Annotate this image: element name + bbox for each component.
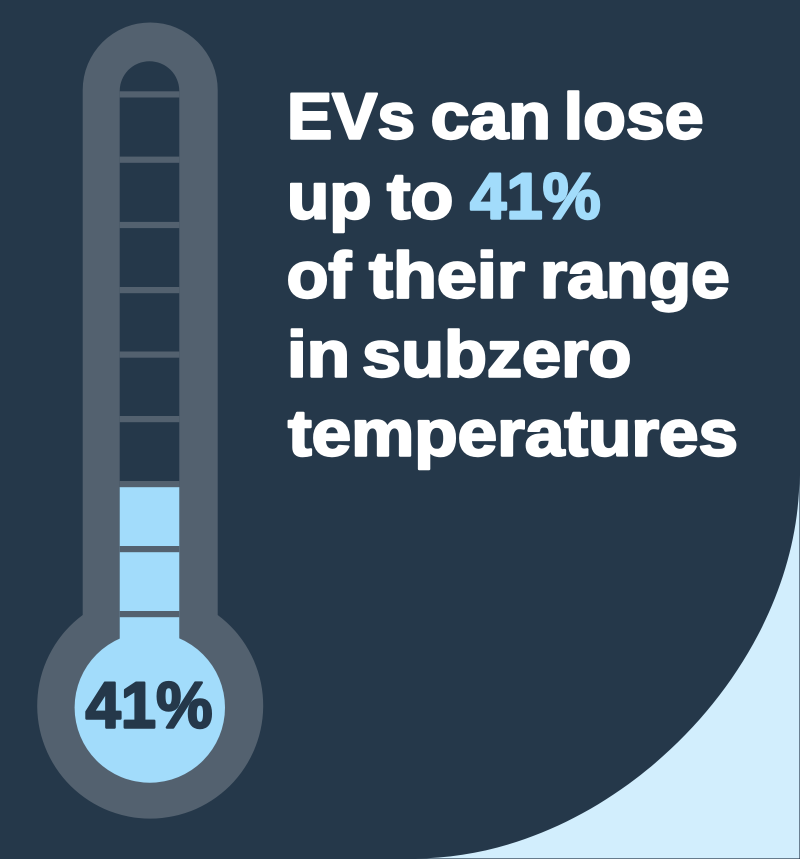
headline line 2: to bbox=[387, 160, 453, 232]
headline highlighted figure: 41% bbox=[470, 160, 601, 232]
headline line 2 bbox=[287, 160, 453, 232]
corner accent: light blue curved shape bbox=[415, 475, 799, 858]
headline line 5: temperatures bbox=[288, 396, 738, 470]
headline line 2: up bbox=[287, 160, 372, 232]
headline line 1 bbox=[287, 80, 704, 152]
headline line 1: lose bbox=[564, 80, 704, 152]
mercury column bbox=[120, 487, 179, 657]
thermometer inner tube bbox=[120, 61, 179, 640]
headline line 3: of bbox=[287, 238, 352, 312]
headline line 3 bbox=[287, 238, 730, 312]
headline line 1: can bbox=[431, 80, 551, 152]
headline bbox=[287, 80, 738, 470]
headline line 3: their bbox=[369, 238, 525, 312]
thermometer bbox=[37, 22, 263, 819]
bulb percentage label: 41% bbox=[86, 668, 212, 742]
headline line 4: in bbox=[287, 318, 350, 390]
headline line 1: EVs bbox=[287, 80, 415, 152]
scale ticks bbox=[120, 91, 179, 617]
mercury bulb bbox=[75, 632, 225, 783]
thermometer outer casing bbox=[37, 22, 263, 819]
headline line 4: subzero bbox=[362, 318, 631, 390]
headline line 3: range bbox=[540, 238, 730, 312]
